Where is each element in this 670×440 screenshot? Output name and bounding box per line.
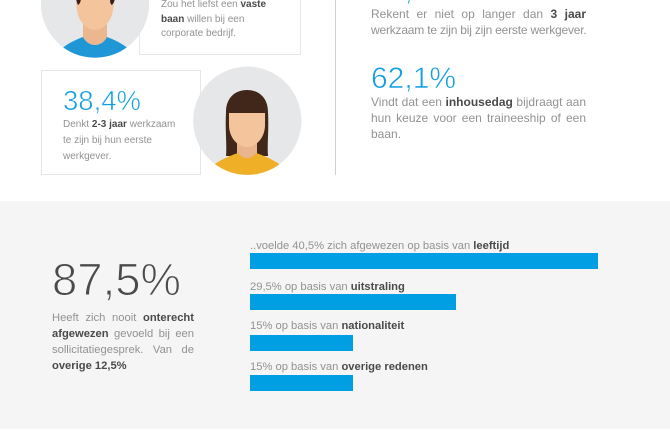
stat: 38,4%: 38,4% — [63, 85, 141, 116]
stat: 87,5% — [52, 254, 194, 372]
bar chart: reasons for rejection — [250, 240, 598, 391]
label: leeftijd: ..voelde 40,5% zich afgewezen op basis van leeftijd — [250, 240, 509, 252]
stat: 3 jaar: Rekent er niet op langer dan 3 jaar — [371, 7, 586, 21]
panel: gray background band — [0, 201, 670, 429]
icon: man avatar — [41, 0, 149, 58]
card: vaste baan — [139, 0, 301, 55]
stat: 87,5%: Heeft zich nooit onterecht — [52, 312, 194, 324]
icon: woman avatar — [193, 66, 302, 175]
label: uitstraling: 29,5% op basis van uitstraling — [250, 281, 405, 293]
label: nationaliteit: 15% op basis van nationaliteit — [250, 320, 404, 332]
text: vaste baan: corporate bedrijf. — [161, 28, 236, 39]
stat: 62,1% — [371, 62, 586, 140]
stat: 87,5%: overige 12,5% — [52, 360, 127, 372]
bar: nationaliteit — [250, 335, 353, 351]
stat: 62,1%: 62,1% — [371, 62, 456, 95]
stat: 38,4%: te zijn bij hun eerste — [63, 134, 152, 146]
stat: 87,5%: 87,5% — [52, 254, 181, 305]
text: vaste baan — [161, 0, 266, 39]
stat: 87,5%: sollicitatiegesprek. Van de — [52, 344, 194, 356]
stat: 38,4%: Denkt 2-3 jaar werkzaam — [63, 118, 175, 130]
label: overige redenen: 15% op basis van overige redenen — [250, 361, 428, 373]
card: 38,4% — [41, 70, 201, 175]
stat: 3 jaar — [371, 0, 586, 37]
stat: 62,1%: baan. — [371, 126, 401, 140]
divider line — [334, 0, 336, 175]
stat: 3 jaar: werkzaam te zijn bij zijn eerste werkgever. — [371, 23, 586, 37]
bar: overige redenen — [250, 375, 353, 391]
stat: 38,4%: werkgever. — [63, 150, 111, 162]
stat: 62,1%: Vindt dat een inhousedag bijdraagt aan — [371, 94, 586, 108]
stat: 87,5%: afgewezen gevoeld bij een — [52, 328, 194, 340]
bar: uitstraling — [250, 294, 456, 310]
stat: 38,4% — [63, 85, 175, 162]
stat: 62,1%: hun keuze voor een traineeship of een — [371, 110, 586, 124]
text: vaste baan: baan willen bij een — [161, 14, 244, 25]
bar: leeftijd — [250, 253, 598, 269]
